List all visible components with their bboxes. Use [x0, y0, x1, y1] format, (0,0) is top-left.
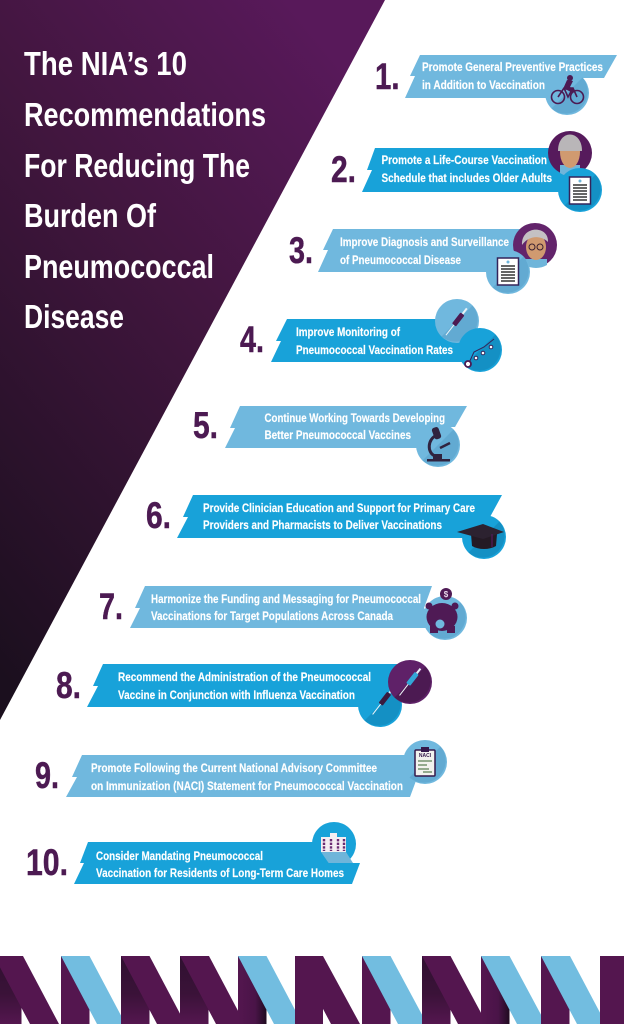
recommendation 8: Vaccine in Conjunction with Influenza Vaccination	[118, 690, 355, 702]
recommendation 9: on Immunization (NACI) Statement for Pneumococcal Vaccination	[91, 781, 403, 793]
recommendation 7: Vaccinations for Target Populations Across Canada	[151, 611, 394, 623]
recommendation 2	[331, 131, 602, 212]
recommendation 6: 6.	[146, 495, 171, 536]
icon: syringe on blue	[358, 683, 402, 727]
recommendation 9	[35, 740, 447, 797]
recommendation 4: Pneumococcal Vaccination Rates	[296, 345, 453, 357]
title: The NIA’s 10	[24, 45, 187, 82]
title: Recommendations	[24, 96, 266, 133]
title: Pneumococcal	[24, 248, 214, 285]
title	[24, 45, 266, 335]
panel: purple diagonal title background	[0, 0, 385, 720]
icon: document	[486, 250, 530, 294]
recommendation 2: Schedule that includes Older Adults	[382, 173, 552, 185]
icon: older adult with glasses	[513, 223, 557, 268]
recommendation 2: Promote a Life-Course Vaccination	[382, 155, 547, 167]
icon: piggy bank	[423, 588, 467, 640]
recommendation 8: 8.	[56, 665, 81, 706]
title: Burden Of	[24, 197, 157, 234]
recommendation 5: 5.	[193, 405, 218, 446]
recommendation 1: in Addition to Vaccination	[422, 80, 545, 92]
recommendation 4	[240, 299, 502, 372]
icon: microscope	[416, 423, 460, 467]
title: Disease	[24, 298, 124, 335]
icon: NACI clipboard: NACI	[419, 753, 432, 759]
recommendation 3	[289, 223, 557, 294]
recommendation 4: 4.	[240, 319, 264, 360]
icon: NACI clipboard	[403, 740, 447, 784]
recommendation 1	[375, 55, 617, 115]
recommendation 10: Consider Mandating Pneumococcal	[96, 851, 263, 863]
recommendation 6	[146, 495, 506, 559]
icon: older adult	[548, 131, 592, 177]
recommendation 10: Vaccination for Residents of Long-Term Care Homes	[96, 868, 344, 880]
recommendation 5: Continue Working Towards Developing	[264, 413, 445, 425]
recommendation 8: Recommend the Administration of the Pneumococcal	[118, 672, 371, 684]
recommendation 5	[193, 405, 467, 467]
recommendation 6: Providers and Pharmacists to Deliver Vaccinations	[203, 520, 442, 532]
icon: bicycle rider	[545, 71, 589, 115]
recommendation 5: Better Pneumococcal Vaccines	[264, 430, 411, 442]
recommendation 7: 7.	[99, 586, 123, 627]
footer ribbon pattern	[0, 956, 624, 1024]
recommendation 8	[56, 660, 432, 727]
recommendation 7: Harmonize the Funding and Messaging for Pneumococcal	[151, 594, 421, 606]
recommendation 10: 10.	[26, 842, 68, 883]
recommendation 9: 9.	[35, 755, 59, 796]
recommendation 4: Improve Monitoring of	[296, 327, 400, 339]
icon: rates line chart	[458, 328, 502, 372]
icon: hospital	[312, 822, 356, 866]
recommendation 1: 1.	[375, 56, 400, 97]
icon: document	[558, 168, 602, 212]
icon: syringe	[435, 299, 479, 343]
recommendation 10	[26, 822, 360, 884]
recommendation 6: Provide Clinician Education and Support for Primary Care	[203, 503, 475, 515]
recommendation 9: Promote Following the Current National Advisory Committee	[91, 763, 377, 775]
icon: graduation cap	[457, 515, 506, 559]
recommendation 7	[99, 586, 467, 640]
recommendation 3: 3.	[289, 230, 313, 271]
icon: piggy bank: $	[444, 590, 449, 599]
recommendation 3: Improve Diagnosis and Surveillance	[340, 237, 509, 249]
title: For Reducing The	[24, 147, 250, 184]
recommendation 2: 2.	[331, 149, 356, 190]
icon: syringe on purple	[388, 660, 432, 704]
recommendation 3: of Pneumococcal Disease	[340, 255, 461, 267]
